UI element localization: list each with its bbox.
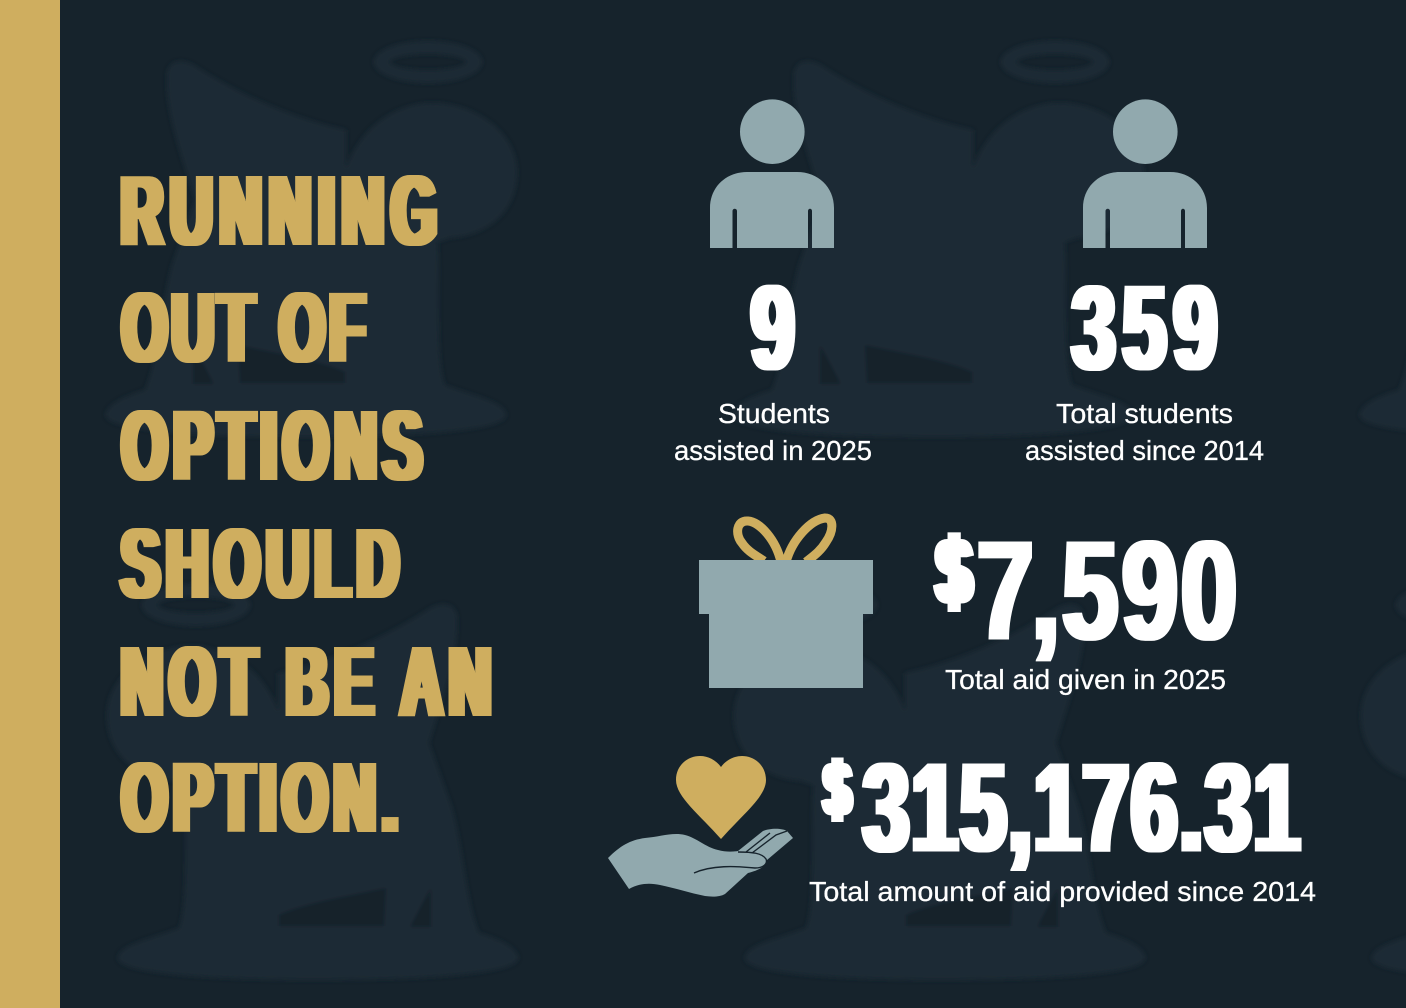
icon: person [710, 99, 834, 248]
number: 9: 9 [751, 261, 794, 395]
title: OUT OF [122, 273, 365, 384]
label: students assisted in 2025: assisted in 2025 [674, 435, 872, 466]
icon: person [1083, 99, 1207, 248]
title: NOT BE AN [121, 627, 491, 738]
label: total students assisted since 2014: assisted since 2014 [1025, 435, 1264, 466]
icon: gift box [699, 518, 873, 688]
gold side stripe [0, 0, 60, 1008]
title: OPTIONS [122, 391, 422, 502]
stat: total students since 2014 [1025, 99, 1264, 466]
title [121, 156, 491, 854]
stat: total aid given in 2025 [699, 513, 1237, 695]
icon: heart in open hand [608, 756, 793, 897]
title: RUNNING [121, 156, 437, 267]
number: 359: 359 [1072, 261, 1217, 395]
number: $7,590: 7,590 [977, 513, 1237, 670]
label: students assisted in 2025: Students [718, 398, 830, 429]
title: OPTION. [122, 743, 398, 854]
stat: students assisted in 2025 [674, 99, 872, 466]
label: students assisted in 2025 [674, 398, 872, 466]
title: SHOULD [121, 509, 399, 620]
label: total amount of aid provided since 2014: Total amount of aid provided since 2014 [809, 876, 1316, 907]
label: total students assisted since 2014 [1025, 398, 1264, 466]
label: total students assisted since 2014: Total students [1056, 398, 1233, 429]
number: $315,176.31: 315,176.31 [863, 737, 1300, 878]
label: total aid given in 2025: Total aid given in 2025 [945, 664, 1226, 695]
stat: total aid since 2014 [608, 737, 1316, 907]
number: $315,176.31: $ [825, 744, 850, 833]
number: $7,590: $ [937, 519, 971, 627]
